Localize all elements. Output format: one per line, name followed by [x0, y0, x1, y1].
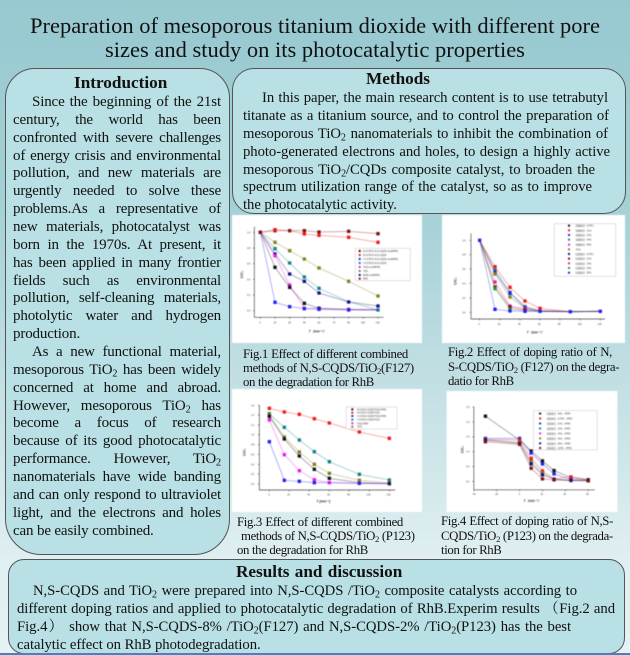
title: Preparation of mesoporous titanium dioxide with different pore — [30, 13, 600, 38]
chart: figure 4: 0.5 — [466, 467, 470, 469]
chart: figure 1: 45 — [303, 323, 306, 325]
text block: results body: N,S-CQDS and TiO2 were prepared into N,S-CQDS /TiO2 composite catalysts according to — [33, 583, 577, 600]
chart: figure 1: I:I:0.5TiO2 /N,S-CQDS — [363, 263, 387, 265]
chart: figure 1: TiO2 — [363, 271, 369, 273]
text block: results body: Fig.4） show that N,S-CQDS-8% /TiO2(F127) and N,S-CQDS-2% /TiO2(P123) has the best — [17, 619, 571, 636]
chart: figure 2: 0.2 — [462, 298, 466, 300]
chart: figure 2: 前驱复合（1%） — [576, 228, 593, 232]
heading: introduction: Introduction — [74, 73, 167, 92]
chart: figure 1: I:I:0.5TiO2 /N,S-CQDS+1mMPMS — [363, 259, 398, 261]
chart: figure 1: 120 — [376, 323, 380, 325]
chart: figure 1: RhB/+1mMPMS — [363, 275, 380, 277]
chart: figure 3: 0 — [268, 495, 270, 497]
chart: figure 2: 前驱复合（8%） — [576, 243, 593, 247]
chart: figure 1: 0.2 — [247, 295, 251, 297]
text block: introduction body: century, the world has been — [13, 112, 221, 128]
chart: figure 4: T（min⁻¹） — [524, 499, 541, 503]
text block: methods body: In this paper, the main research content is to use tetrabutyl — [262, 90, 608, 106]
chart: figure 2: 0.0 — [462, 312, 466, 314]
text block: introduction body: can be easily combined. — [13, 523, 154, 539]
text block: introduction body: light, and the electrons and holes — [13, 505, 221, 521]
panel: introduction — [5, 68, 230, 555]
chart: figure 2: 1.0 — [462, 240, 466, 242]
chart: figure 2: 回流复合（1%） — [576, 257, 593, 261]
chart: figure 4: 回流复合（4%）+PMS — [547, 431, 571, 435]
chart: figure 3: 0.2 — [251, 474, 255, 476]
chart: figure 3 — [232, 388, 422, 512]
text block: methods body: mesoporous TiO2/CQDs composite catalyst, to broaden the — [243, 162, 595, 179]
caption: figure 3: on the degradation for RhB — [237, 543, 368, 557]
text block: introduction body: As a new functional material, — [32, 344, 221, 360]
text block: introduction body: Since the beginning of the 21st — [32, 94, 221, 110]
text block: introduction body: confronted with severe challenges — [13, 130, 221, 146]
caption: figure 3: Fig.3 Effect of different combined — [237, 515, 403, 529]
chart: figure 4: 60 — [586, 494, 589, 496]
chart: figure 3: 100 — [367, 495, 371, 497]
heading: methods: Methods — [366, 69, 430, 88]
chart: figure 1 — [232, 214, 422, 344]
text block: introduction body: nanomaterials have wide banding — [13, 469, 221, 485]
caption: figure 1: methods of N,S-CQDS/TiO2(F127) — [243, 361, 414, 376]
chart: figure 3: T (min⁻¹) — [316, 499, 331, 503]
chart: figure 2: 回流复合（2%） — [576, 261, 593, 265]
text block: introduction body: production. — [13, 326, 80, 342]
chart: figure 2: 回流复合（0.5%） — [576, 252, 595, 256]
caption: figure 1 — [243, 346, 414, 389]
chart: figure 1: 75 — [333, 323, 336, 325]
chart: figure 2: C/C₀ — [454, 277, 458, 285]
chart: figure 3: 1.4 — [251, 415, 255, 417]
chart: figure 3: III:0.5N,S-CQDS/TiO2 — [357, 413, 381, 415]
chart: figure 4: 2.5 — [466, 407, 470, 409]
title: sizes and study on its photocatalytic properties — [105, 36, 525, 62]
chart: figure 3: TiO2+PMS — [357, 423, 369, 425]
chart: figure 4: 回流复合（2%）+PMS — [547, 426, 571, 430]
text block: methods body: photo-generated electrons and holes, to design a highly active — [243, 144, 610, 160]
chart: figure 1: TiO2/+1mMPMS — [363, 267, 381, 269]
caption: figure 4: CQDS/TiO2 (P123) on the degrada- — [441, 529, 613, 544]
chart: figure 4: C/C₀ — [461, 445, 465, 453]
text block: introduction body: problems.As a representative of — [13, 201, 221, 217]
text block: introduction body — [13, 94, 222, 539]
chart: figure 4: 40 — [563, 494, 567, 496]
text block: introduction body: because of its good photocatalytic — [13, 433, 221, 449]
chart: figure 1: 0.6 — [247, 264, 251, 266]
chart: figure 2: 前驱复合（2%） — [576, 233, 593, 237]
text block: introduction body: and can only respond to ultraviolet — [13, 487, 221, 503]
caption: figure 2: S-CQDS/TiO2 (F127) on the degra- — [448, 360, 619, 375]
chart: figure 2: 0.6 — [462, 269, 466, 271]
text block: introduction body: concerned at home and abroad. — [13, 380, 221, 396]
chart: figure 1: RhB — [363, 279, 368, 281]
chart: figure 1: 105 — [361, 323, 366, 325]
chart: figure 3: 20 — [287, 495, 291, 497]
chart: figure 3: 0.0 — [251, 484, 255, 486]
chart: figure 3: 0.6 — [251, 454, 255, 456]
text block: introduction body: fields such as environmental — [13, 273, 221, 289]
text block: introduction body: performance. However, TiO2 — [13, 451, 221, 469]
chart: figure 4: 回流复合（0%）+PMS — [547, 412, 571, 416]
chart: figure 4: 回流复合（10%）+PMS — [547, 446, 572, 450]
panel: results and discussion — [8, 559, 625, 654]
chart: figure 2: 回流复合（8%） — [576, 271, 593, 275]
text block: results body: catalytic effect on RhB photodegradation. — [17, 637, 261, 653]
chart: figure 3: 0.4 — [251, 464, 255, 466]
chart: figure 1: 30 — [288, 323, 292, 325]
chart: figure 3: 60 — [327, 495, 331, 497]
caption: figure 3 — [237, 515, 415, 557]
chart: figure 3: TiO2 — [357, 427, 363, 429]
chart: figure 4: 回流复合（8%）+PMS — [547, 441, 571, 445]
chart: figure 3: 120 — [387, 495, 391, 497]
caption: figure 3: methods of N,S-CQDS/TiO2 (P123) — [241, 529, 415, 544]
text block: introduction body: However, mesoporous TiO2 has — [13, 398, 221, 416]
heading: results and discussion: Results and discussion — [236, 562, 402, 581]
chart: figure 3: C/C₀ — [243, 448, 247, 456]
chart: figure 3: 40 — [307, 495, 311, 497]
chart: figure 4: 20 — [540, 494, 544, 496]
caption: figure 2: Fig.2 Effect of doping ratio of N, — [448, 344, 612, 358]
chart: figure 2: T（min⁻¹） — [527, 330, 544, 334]
chart: figure 2: 100 — [578, 324, 582, 326]
text block: results body: different doping ratios and applied to photocatalytic degradation of RhB.Experim results （Fig.2 and — [17, 601, 615, 617]
text block: methods body — [243, 90, 610, 213]
chart: figure 1: 60 — [318, 323, 321, 325]
chart: figure 4: 2.0 — [466, 422, 470, 424]
caption: figure 4: Fig.4 Effect of doping ratio of N,S- — [441, 514, 613, 528]
title — [30, 13, 600, 62]
chart: figure 2: 回流复合（4%） — [576, 266, 593, 270]
text block: methods body: spectrum utilization range of the catalyst, so as to improve — [243, 179, 592, 195]
chart: figure 3: 80 — [347, 495, 351, 497]
chart: figure 4: 1.0 — [466, 452, 470, 454]
text block: methods body: the photocatalytic activity. — [243, 197, 397, 213]
chart: figure 3: I:I:0.5N,S-CQDS/TiO2 — [357, 420, 381, 422]
text block: introduction body: new materials, photocatalyst was — [13, 219, 221, 235]
chart: figure 4: 1.5 — [466, 437, 470, 439]
chart: figure 1: 0.4 — [247, 279, 251, 281]
chart: figure 2: 120 — [598, 324, 602, 326]
chart: figure 3: 1.2 — [251, 425, 255, 427]
caption: figure 2: datio for RhB — [448, 374, 514, 388]
text block: results body — [17, 583, 615, 653]
panel: methods — [232, 68, 626, 214]
text block: introduction body: of energy crisis and environmental — [13, 148, 221, 164]
chart: figure 1: 0.8 — [247, 248, 251, 250]
text block: methods body: titanate as a titanium source, and to control the preparation of — [243, 108, 609, 124]
chart: figure 2: TiO2 — [576, 249, 581, 251]
text block: introduction body: pollution, self-cleaning materials, — [13, 290, 221, 306]
caption: figure 2 — [448, 344, 620, 388]
text block: introduction body: pollution, and new materials are — [13, 165, 221, 181]
chart: figure 1: 15 — [274, 323, 277, 325]
caption: figure 4 — [441, 514, 613, 557]
chart: figure 2: 0.8 — [462, 255, 466, 257]
chart: figure 2: 80 — [558, 324, 561, 326]
chart: figure 2: 0.4 — [462, 283, 466, 285]
text block: introduction body: urgently needed to solve these — [13, 183, 221, 199]
chart: figure 2: 0 — [479, 324, 481, 326]
chart: figure 4: 0.0 — [466, 481, 470, 483]
text block: methods body: mesoporous TiO2 nanomaterials to inhibit the combination of — [243, 126, 608, 143]
bottom edge line — [0, 653, 630, 655]
chart: figure 1: 1.0 — [247, 232, 251, 234]
caption: figure 1: Fig.1 Effect of different combined — [243, 346, 408, 360]
chart: figure 2: 前驱复合（4%） — [576, 238, 593, 242]
chart: figure 1: C/C₀ — [240, 270, 244, 278]
chart: figure 3: 1.0 — [251, 435, 255, 437]
text block: introduction body: photolytic water and hydrogen — [13, 308, 221, 324]
text block: introduction body: born in the 1970s. At present, it — [13, 237, 221, 253]
chart: figure 4: 回流复合（1%）+PMS — [547, 421, 571, 425]
chart: figure 2: 60 — [538, 324, 541, 326]
chart: figure 1: 0.0 — [247, 311, 251, 313]
text block: introduction body: has been applied in many frontier — [13, 255, 221, 271]
chart: figure 4: 回流复合（6%）+PMS — [547, 436, 571, 440]
chart: figure 1: 0 — [259, 323, 261, 325]
caption: figure 4: tion for RhB — [441, 543, 502, 557]
chart: figure 4: 0 — [519, 494, 521, 496]
chart: figure 1: III:0.5TiO2 /N,S-CQDS — [363, 255, 387, 257]
text block: introduction body: become a focus of research — [13, 415, 221, 431]
chart: figure 2 — [442, 214, 626, 344]
chart: figure 3: III:0.5N,S-CQDS/TiO2+PMS — [357, 409, 387, 411]
chart: figure 1: III:0.5TiO2 /N,S-CQDS+1mMPMS — [363, 251, 398, 253]
chart: figure 3: 1.6 — [251, 405, 255, 407]
caption: figure 1: on the degradation for RhB — [243, 375, 374, 389]
chart: figure 3: 0.8 — [251, 445, 255, 447]
text block: introduction body: mesoporous TiO2 has been widely — [13, 362, 221, 380]
chart: figure 1: T（min⁻¹） — [309, 330, 326, 334]
chart: figure 4: 回流复合（0.5%）+PMS — [547, 417, 573, 421]
chart: figure 4: -40 — [472, 494, 476, 496]
chart: figure 4 — [446, 390, 618, 512]
chart: figure 2: 前驱复合（0.5%） — [576, 224, 595, 228]
chart: figure 1: 90 — [347, 323, 351, 325]
chart: figure 4: -20 — [495, 494, 499, 496]
chart: figure 3: I:I:0.5N,S-CQDS/TiO2+PMS — [357, 416, 387, 418]
chart: figure 2: 20 — [498, 324, 501, 326]
chart: figure 2: 40 — [518, 324, 521, 326]
